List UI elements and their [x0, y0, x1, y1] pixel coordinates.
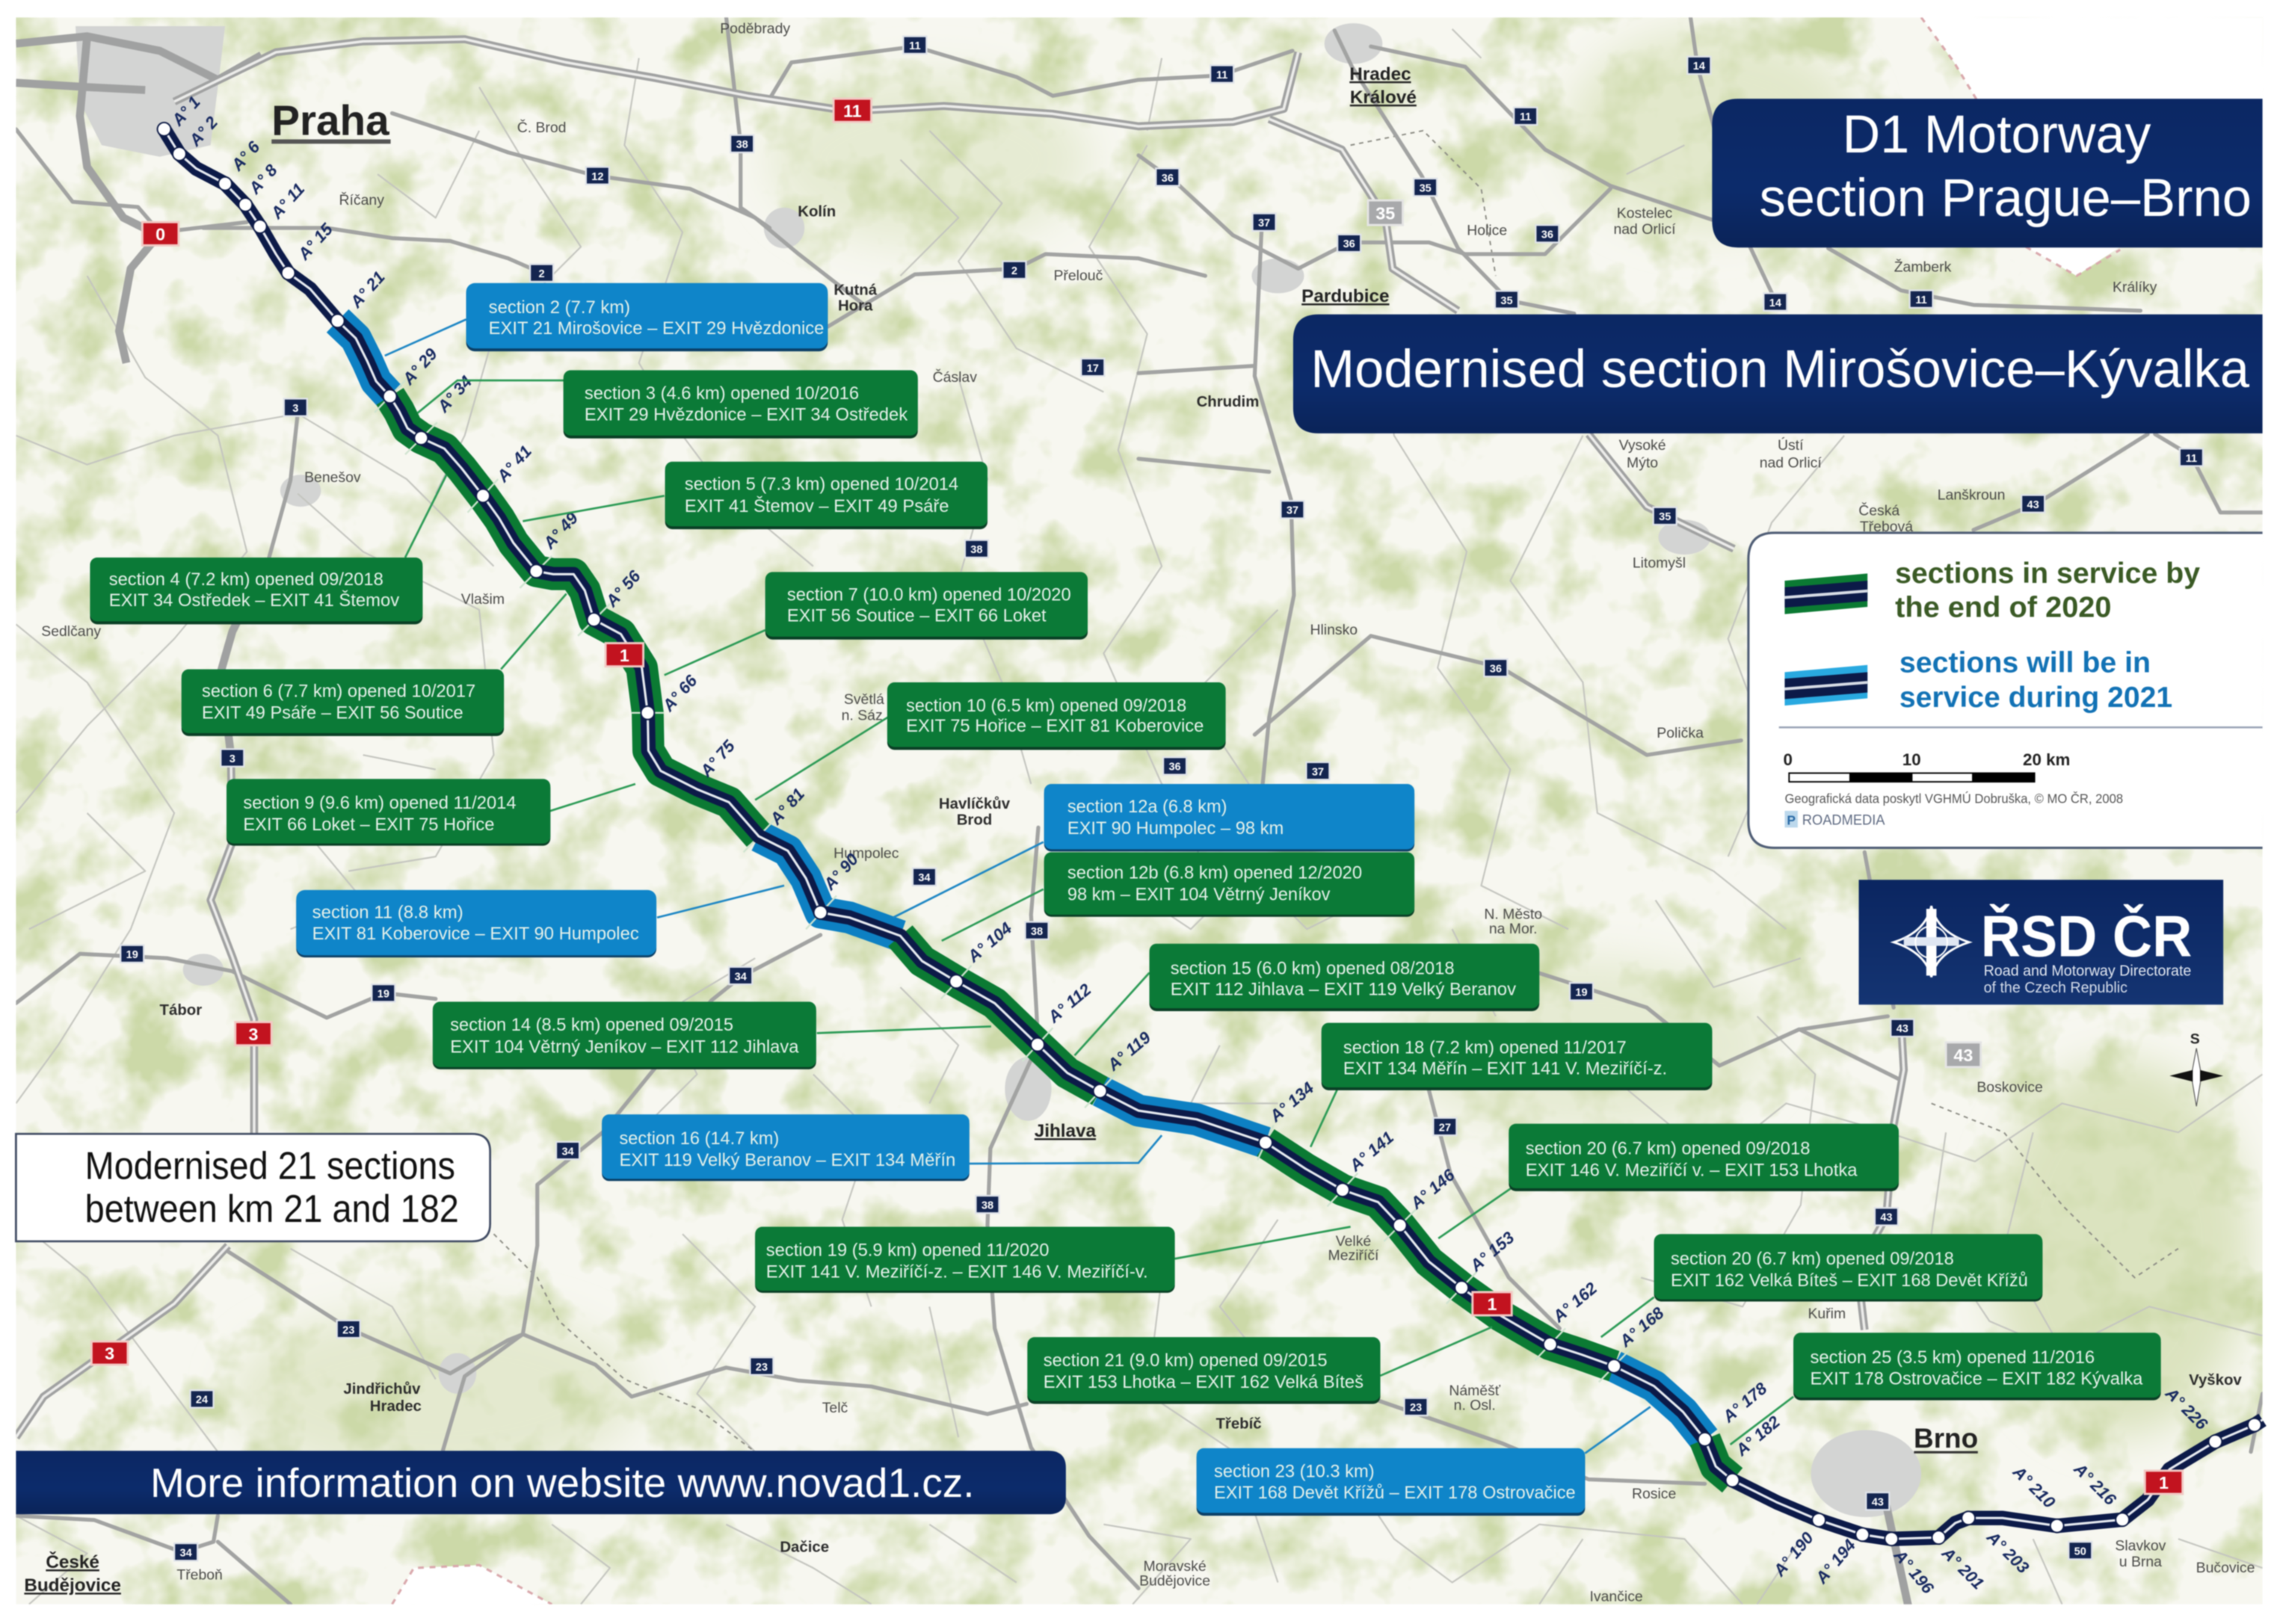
section box: section 12a [1044, 784, 1414, 851]
section box: section 20 (146–153): section 20 (6.7 km) opened 09/2018 [1526, 1138, 1810, 1158]
section box: section 4 [90, 558, 422, 624]
title banner: D1 Motorway section Prague–Brno: D1 Motorway [1843, 105, 2151, 164]
section box: section 19 [755, 1227, 1175, 1293]
exit kilometre labels: A° 201 [1938, 1543, 1988, 1593]
town labels: Králíky [2113, 279, 2157, 295]
road number signs: 17 [1087, 362, 1099, 374]
road number signs: 36 [1541, 229, 1553, 241]
section box: section 20 (146–153): EXIT 146 V. Meziříčí v. – EXIT 153 Lhotka [1526, 1161, 1858, 1181]
section box: section 23: EXIT 168 Devět Křížů – EXIT 178 Ostrovačice [1214, 1483, 1576, 1503]
road number signs: 12 [591, 171, 603, 183]
town labels: Polička [1657, 725, 1704, 741]
road number signs: 38 [982, 1200, 993, 1211]
section box: section 15: section 15 (6.0 km) opened 08/2018 [1171, 958, 1455, 978]
road number signs: 24 [196, 1395, 209, 1407]
section box: section 16: section 16 (14.7 km) [620, 1129, 779, 1149]
legend swatch: blue [1784, 665, 1867, 706]
section box: section 12b [1044, 852, 1414, 917]
exit kilometre labels: A° 34 [434, 372, 476, 416]
section box: section 25 [1793, 1333, 2161, 1401]
road number signs: 35 [1659, 511, 1671, 523]
logo icon: interchange cross [1894, 906, 1969, 977]
callout: Modernised 21 sections [16, 1134, 490, 1241]
compass rose: S [2190, 1031, 2200, 1048]
section box: section 4: section 4 (7.2 km) opened 09/2018 [109, 569, 383, 590]
town labels: Dačice [780, 1540, 829, 1556]
town labels: Sedlčany [41, 623, 101, 640]
section box: section 23: section 23 (10.3 km) [1214, 1462, 1375, 1482]
town labels: Č. Brod [517, 119, 566, 136]
exit kilometre labels: A° 56 [602, 566, 644, 611]
logo: ŘSD ČR: Road and Motorway Directorate [1984, 963, 2191, 979]
section box: section 6: section 6 (7.7 km) opened 10/2017 [202, 681, 475, 701]
road number signs: 35 [1500, 295, 1513, 307]
D1 red motorway shields and other red signs: 3 [248, 1025, 258, 1044]
road number signs: 23 [1410, 1402, 1422, 1414]
town labels: Jindřichův [343, 1381, 421, 1398]
subtitle banner: Modernised section [1293, 315, 2263, 433]
legend text: in service by 2020: sections in service by [1895, 558, 2200, 590]
exit kilometre labels: A° 190 [1769, 1528, 1817, 1581]
section box: section 12a: section 12a (6.8 km) [1067, 797, 1227, 817]
section box: section 19: EXIT 141 V. Meziříčí-z. – EXIT 146 V. Meziříčí-v. [766, 1262, 1148, 1282]
D1 red motorway shields and other red signs: 1 [620, 646, 629, 665]
town labels: Kolín [798, 203, 836, 220]
section box: section 9: section 9 (9.6 km) opened 11/2014 [243, 793, 517, 813]
town labels: Humpolec [834, 845, 899, 862]
section box: section 23 [1197, 1448, 1585, 1516]
title banner: D1 Motorway section Prague–Brno [1712, 99, 2263, 247]
section box: section 16 [602, 1114, 970, 1181]
road number signs: 23 [342, 1324, 354, 1336]
road number signs: 38 [970, 544, 982, 556]
town labels: u Brna [2119, 1554, 2162, 1570]
road number signs: 34 [561, 1146, 575, 1158]
town labels: Chrudim [1197, 394, 1259, 410]
road number signs: 2 [1011, 265, 1017, 277]
road number signs: 11 [2186, 453, 2197, 465]
town labels: Třebová [1860, 519, 1913, 535]
town labels: Telč [822, 1400, 848, 1416]
D1 red motorway shields and other red signs [91, 99, 2183, 1494]
town labels: Poděbrady [720, 21, 790, 37]
exit kilometre labels: A° 15 [294, 220, 336, 264]
section box: section 6 [182, 670, 504, 736]
section box: section 18: EXIT 134 Měřín – EXIT 141 V. Meziříčí-z. [1343, 1059, 1667, 1079]
section box: section 12a: EXIT 90 Humpolec – 98 km [1067, 818, 1284, 839]
road number signs: 19 [1575, 987, 1588, 999]
section box: section 10: section 10 (6.5 km) opened 09/2018 [906, 696, 1186, 716]
grey motorway plans signs: 43 [1953, 1046, 1973, 1065]
section box: section 15: EXIT 112 Jihlava – EXIT 119 Velký Beranov [1171, 980, 1517, 1000]
city areas [76, 23, 1921, 1517]
section box: section 14: section 14 (8.5 km) opened 09/2015 [450, 1015, 733, 1035]
callout: Modernised 21 sections: Modernised 21 sections [85, 1143, 455, 1187]
exit kilometre labels: A° 226 [2161, 1383, 2212, 1433]
road number signs: 19 [126, 949, 138, 961]
town labels: Česká [1858, 502, 1899, 519]
section box: section 4: EXIT 34 Ostředek – EXIT 41 Štemov [109, 590, 400, 611]
exit kilometre labels: A° 196 [1890, 1546, 1938, 1598]
section box: section 14 [433, 1001, 816, 1069]
section box: section 12b: 98 km – EXIT 104 Větrný Jeníkov [1067, 884, 1331, 904]
exit kilometre labels: A° 210 [2009, 1462, 2059, 1512]
exit kilometre labels: A° 90 [819, 850, 862, 894]
section box: section 18 [1322, 1023, 1712, 1090]
section boundary ticks [375, 380, 1630, 1382]
exit kilometre labels: A° 75 [696, 736, 739, 781]
section box: section 5: EXIT 41 Štemov – EXIT 49 Psáře [685, 495, 949, 516]
town labels: nad Orlicí [1760, 455, 1822, 472]
road number signs: 3 [229, 753, 235, 765]
town labels: Říčany [339, 191, 384, 209]
section box: section 5: section 5 (7.3 km) opened 10/2014 [685, 475, 958, 495]
town labels: Velké [1336, 1233, 1371, 1250]
exit kilometre labels: A° 146 [1406, 1165, 1458, 1213]
exit kilometre labels: A° 178 [1719, 1379, 1771, 1427]
town labels: Pardubice [1301, 286, 1389, 306]
banner: more information [16, 1451, 1066, 1514]
logo: ŘSD ČR [1859, 880, 2223, 1004]
road number signs: 34 [918, 872, 931, 884]
exit kilometre labels: A° 203 [1982, 1527, 2033, 1578]
town labels: Mýto [1627, 455, 1658, 472]
city: Praha: Praha [271, 97, 389, 144]
town labels: Hlinsko [1310, 622, 1358, 638]
legend text: in service during 2021 [1899, 646, 2172, 714]
town labels: Kutná [834, 282, 878, 298]
exit kilometre labels: A° 119 [1103, 1028, 1154, 1075]
town labels: Třebíč [1215, 1416, 1262, 1433]
section box: section 15 [1150, 944, 1539, 1011]
road number signs: 19 [378, 989, 389, 1001]
road number signs: 37 [1258, 217, 1270, 229]
section box: section 25: section 25 (3.5 km) opened 11/2016 [1810, 1347, 2095, 1368]
town labels: Čáslav [933, 368, 977, 386]
RoadMedia mark: ROADMEDIA [1802, 812, 1885, 828]
exit kilometre labels: A° 182 [1732, 1412, 1784, 1460]
section box: section 2 [466, 283, 828, 351]
section box: section 21: section 21 (9.0 km) opened 09/2015 [1044, 1350, 1328, 1371]
exit kilometre labels: A° 41 [493, 442, 535, 486]
legend swatch: green [1784, 573, 1867, 614]
banner: more information: More information on website www.novad1.cz. [150, 1460, 974, 1506]
road number signs: 37 [1287, 505, 1298, 517]
scale bar: 0 [1784, 750, 1793, 769]
town labels: Hora [838, 298, 873, 315]
town labels: n. Sáz. [842, 708, 887, 724]
town labels: Žamberk [1894, 258, 1952, 275]
RoadMedia mark: P [1787, 812, 1796, 827]
town labels: Boskovice [1976, 1079, 2043, 1096]
D1 red motorway shields and other red signs: 11 [843, 101, 862, 120]
town labels: Havlíčkův [939, 796, 1011, 812]
town labels: Rosice [1632, 1486, 1676, 1502]
road number signs: 50 [2074, 1546, 2086, 1558]
town labels: N. Město [1484, 907, 1542, 923]
exit kilometre labels: A° 134 [1266, 1078, 1318, 1126]
road number signs: 11 [909, 40, 921, 52]
town labels: Jihlava [1035, 1121, 1097, 1141]
exit kilometre labels: A° 29 [398, 345, 441, 389]
town labels: Kuřim [1808, 1306, 1846, 1322]
section box: section 19: section 19 (5.9 km) opened 11/2020 [766, 1240, 1050, 1260]
road number signs: 36 [1162, 173, 1174, 185]
section box: section 21 [1027, 1337, 1380, 1404]
exit kilometre labels: A° 49 [539, 508, 582, 553]
town labels: Tábor [160, 1002, 202, 1019]
road number signs: 3 [292, 403, 298, 415]
scale bar: 10 [1902, 750, 1921, 769]
section box: section 12b: section 12b (6.8 km) opened 12/2020 [1067, 862, 1362, 883]
compass rose [2169, 1031, 2223, 1106]
section box: section 7: EXIT 56 Soutice – EXIT 66 Loket [787, 605, 1047, 626]
town labels: Světlá [844, 691, 884, 708]
modernisation colour bands along D1 [338, 321, 1733, 1481]
scale bar [1784, 750, 2070, 782]
section box: section 25: EXIT 178 Ostrovačice – EXIT 182 Kývalka [1810, 1368, 2143, 1389]
exit kilometre labels: A° 216 [2070, 1459, 2120, 1509]
town labels: Brod [957, 812, 992, 828]
road number signs: 11 [1915, 294, 1927, 306]
green bands: sections in service by end of 2020 [390, 396, 1733, 1481]
section box: section 14: EXIT 104 Větrný Jeníkov – EXIT 112 Jihlava [450, 1037, 799, 1057]
section box: section 7 [765, 572, 1088, 640]
town labels: na Mor. [1489, 921, 1538, 937]
section box: section 20 (162–168): section 20 (6.7 km) opened 09/2018 [1671, 1249, 1954, 1269]
section box: section 20 (162–168): EXIT 162 Velká Bíteš – EXIT 168 Devět Křížů [1671, 1271, 2028, 1291]
town labels: Hradec [370, 1398, 422, 1415]
road number signs: 43 [1872, 1496, 1884, 1508]
state border [392, 17, 2120, 1605]
motorway D1 dark carriageway [164, 129, 2263, 1539]
town labels: Kostelec [1617, 205, 1673, 221]
road number signs: 14 [1769, 297, 1782, 309]
exit kilometre labels: A° 141 [1346, 1128, 1397, 1176]
exit kilometre labels: A° 8 [244, 161, 281, 198]
section box: section 11 [296, 890, 656, 957]
section box: section 9: EXIT 66 Loket – EXIT 75 Hořice [243, 815, 494, 835]
logo: ŘSD ČR: of the Czech Republic [1984, 980, 2127, 996]
section box: section 20 (146–153) [1509, 1124, 1899, 1191]
road number signs: 23 [756, 1362, 768, 1374]
grey motorway plans signs: 35 [1375, 203, 1395, 223]
road number signs: 43 [2027, 499, 2039, 511]
blue bands: sections in service during 2021 [338, 321, 1705, 1439]
town labels: České [46, 1552, 99, 1572]
exit kilometre labels: A° 112 [1044, 980, 1095, 1027]
leader lines from section boxes to motorway [385, 319, 1793, 1454]
grey motorway plans signs [1368, 200, 1981, 1067]
road number signs: 38 [736, 139, 748, 151]
road number signs: 11 [1216, 70, 1227, 81]
town labels: Lanškroun [1938, 487, 2005, 503]
town labels: Benešov [304, 469, 361, 486]
exit kilometre labels: A° 66 [659, 671, 701, 715]
section box: section 6: EXIT 49 Psáře – EXIT 56 Soutice [202, 703, 463, 723]
data credit: Geografická data poskytl VGHMÚ Dobruška, © MO ČR, 2008 [1784, 790, 2123, 806]
section box: section 10 [887, 682, 1226, 750]
exit kilometre labels: A° 81 [765, 785, 808, 829]
town labels: Hradec [1349, 64, 1411, 84]
subtitle banner: Modernised section: Modernised section Mirošovice–Kývalka [1310, 339, 2249, 399]
town labels: Budějovice [24, 1575, 121, 1596]
regional dashed boundaries [493, 131, 2178, 1510]
section box: section 2: EXIT 21 Mirošovice – EXIT 29 Hvězdonice [489, 318, 824, 339]
section box: section 21: EXIT 153 Lhotka – EXIT 162 Velká Bíteš [1044, 1372, 1364, 1392]
section box: section 11: EXIT 81 Koberovice – EXIT 90 Humpolec [312, 924, 639, 944]
town labels: Třeboň [176, 1567, 223, 1584]
logo: ŘSD ČR: ŘSD ČR [1981, 904, 2192, 969]
road number signs: 14 [1693, 61, 1706, 72]
town labels: Bučovice [2196, 1560, 2255, 1576]
town labels: Vlašim [461, 591, 505, 608]
legend text: in service by 2020: the end of 2020 [1895, 592, 2112, 624]
legend text: in service by 2020 [1895, 558, 2200, 624]
town labels: Ústí [1778, 436, 1804, 454]
callout: Modernised 21 sections: between km 21 and 182 [85, 1187, 459, 1230]
town labels: nad Orlicí [1613, 221, 1676, 238]
city: Brno: Brno [1914, 1423, 1978, 1454]
section box: section 20 (162–168) [1654, 1234, 2042, 1302]
section box: section 3 [564, 370, 918, 439]
road number signs: 2 [539, 268, 545, 280]
road number signs: 11 [1520, 111, 1531, 123]
legend panel [1748, 533, 2263, 847]
town labels: Ivančice [1590, 1589, 1643, 1605]
road number signs: 34 [180, 1547, 193, 1559]
exit kilometre labels: A° 2 [185, 113, 222, 150]
section box: section 5 [665, 462, 987, 529]
town labels: Slavkov [2115, 1538, 2166, 1554]
scale bar: 20 km [2023, 750, 2070, 769]
exit kilometre labels: A° 21 [346, 268, 389, 312]
exit kilometre labels: A° 153 [1466, 1228, 1518, 1276]
road number signs: 43 [1897, 1023, 1908, 1035]
town labels: Vysoké [1619, 437, 1666, 454]
D1 red motorway shields and other red signs: 1 [2159, 1473, 2169, 1492]
town labels: Budějovice [1139, 1572, 1210, 1589]
legend text: in service during 2021: sections will be in [1899, 646, 2151, 679]
exit kilometre labels: A° 11 [267, 179, 308, 223]
town labels: Přelouč [1053, 268, 1103, 284]
section box: section 3: EXIT 29 Hvězdonice – EXIT 34 Ostředek [585, 404, 908, 424]
road number signs: 36 [1168, 762, 1181, 774]
town labels: Moravské [1144, 1558, 1207, 1575]
town labels: Meziříčí [1328, 1247, 1379, 1264]
legend text: in service during 2021: service during 2021 [1899, 682, 2172, 714]
road number signs: 36 [1343, 238, 1355, 250]
section box: section 10: EXIT 75 Hořice – EXIT 81 Koberovice [906, 716, 1204, 736]
section box: section 7: section 7 (10.0 km) opened 10/2020 [787, 584, 1071, 605]
town labels: Holice [1467, 223, 1507, 239]
exit kilometre labels: A° 162 [1549, 1279, 1601, 1327]
section box: section 11: section 11 (8.8 km) [312, 903, 463, 923]
town labels: Vyškov [2189, 1372, 2242, 1389]
D1 red motorway shields and other red signs: 1 [1488, 1294, 1497, 1314]
exit kilometre labels: A° 104 [964, 918, 1016, 966]
road number signs: 34 [735, 971, 748, 983]
exit kilometre labels: A° 6 [227, 138, 264, 175]
D1 red motorway shields and other red signs: 3 [105, 1344, 114, 1363]
exit kilometre labels: A° 168 [1615, 1303, 1668, 1351]
section box: section 2: section 2 (7.7 km) [489, 297, 630, 318]
road number signs: 43 [1880, 1212, 1893, 1224]
exit kilometre labels: A° 1 [167, 93, 204, 130]
town labels: Náměšť [1449, 1383, 1501, 1399]
exit kilometre labels: A° 194 [1811, 1536, 1859, 1587]
section box: section 18: section 18 (7.2 km) opened 11/2017 [1343, 1037, 1627, 1058]
town labels: Litomyšl [1633, 555, 1686, 572]
section box: section 3: section 3 (4.6 km) opened 10/2016 [585, 383, 859, 404]
road number signs: 37 [1312, 766, 1324, 778]
town labels: n. Osl. [1454, 1397, 1496, 1413]
section box: section 16: EXIT 119 Velký Beranov – EXIT 134 Měřín [620, 1150, 955, 1170]
road number signs: 36 [1490, 663, 1502, 675]
road number signs: 27 [1439, 1122, 1451, 1134]
road number signs: 38 [1031, 926, 1043, 938]
title banner: D1 Motorway section Prague–Brno: section Prague–Brno [1759, 168, 2252, 228]
town labels: Králové [1350, 87, 1417, 108]
section box: section 9 [227, 779, 550, 846]
road number signs: 35 [1420, 182, 1432, 194]
D1 red motorway shields and other red signs: 0 [155, 225, 165, 244]
